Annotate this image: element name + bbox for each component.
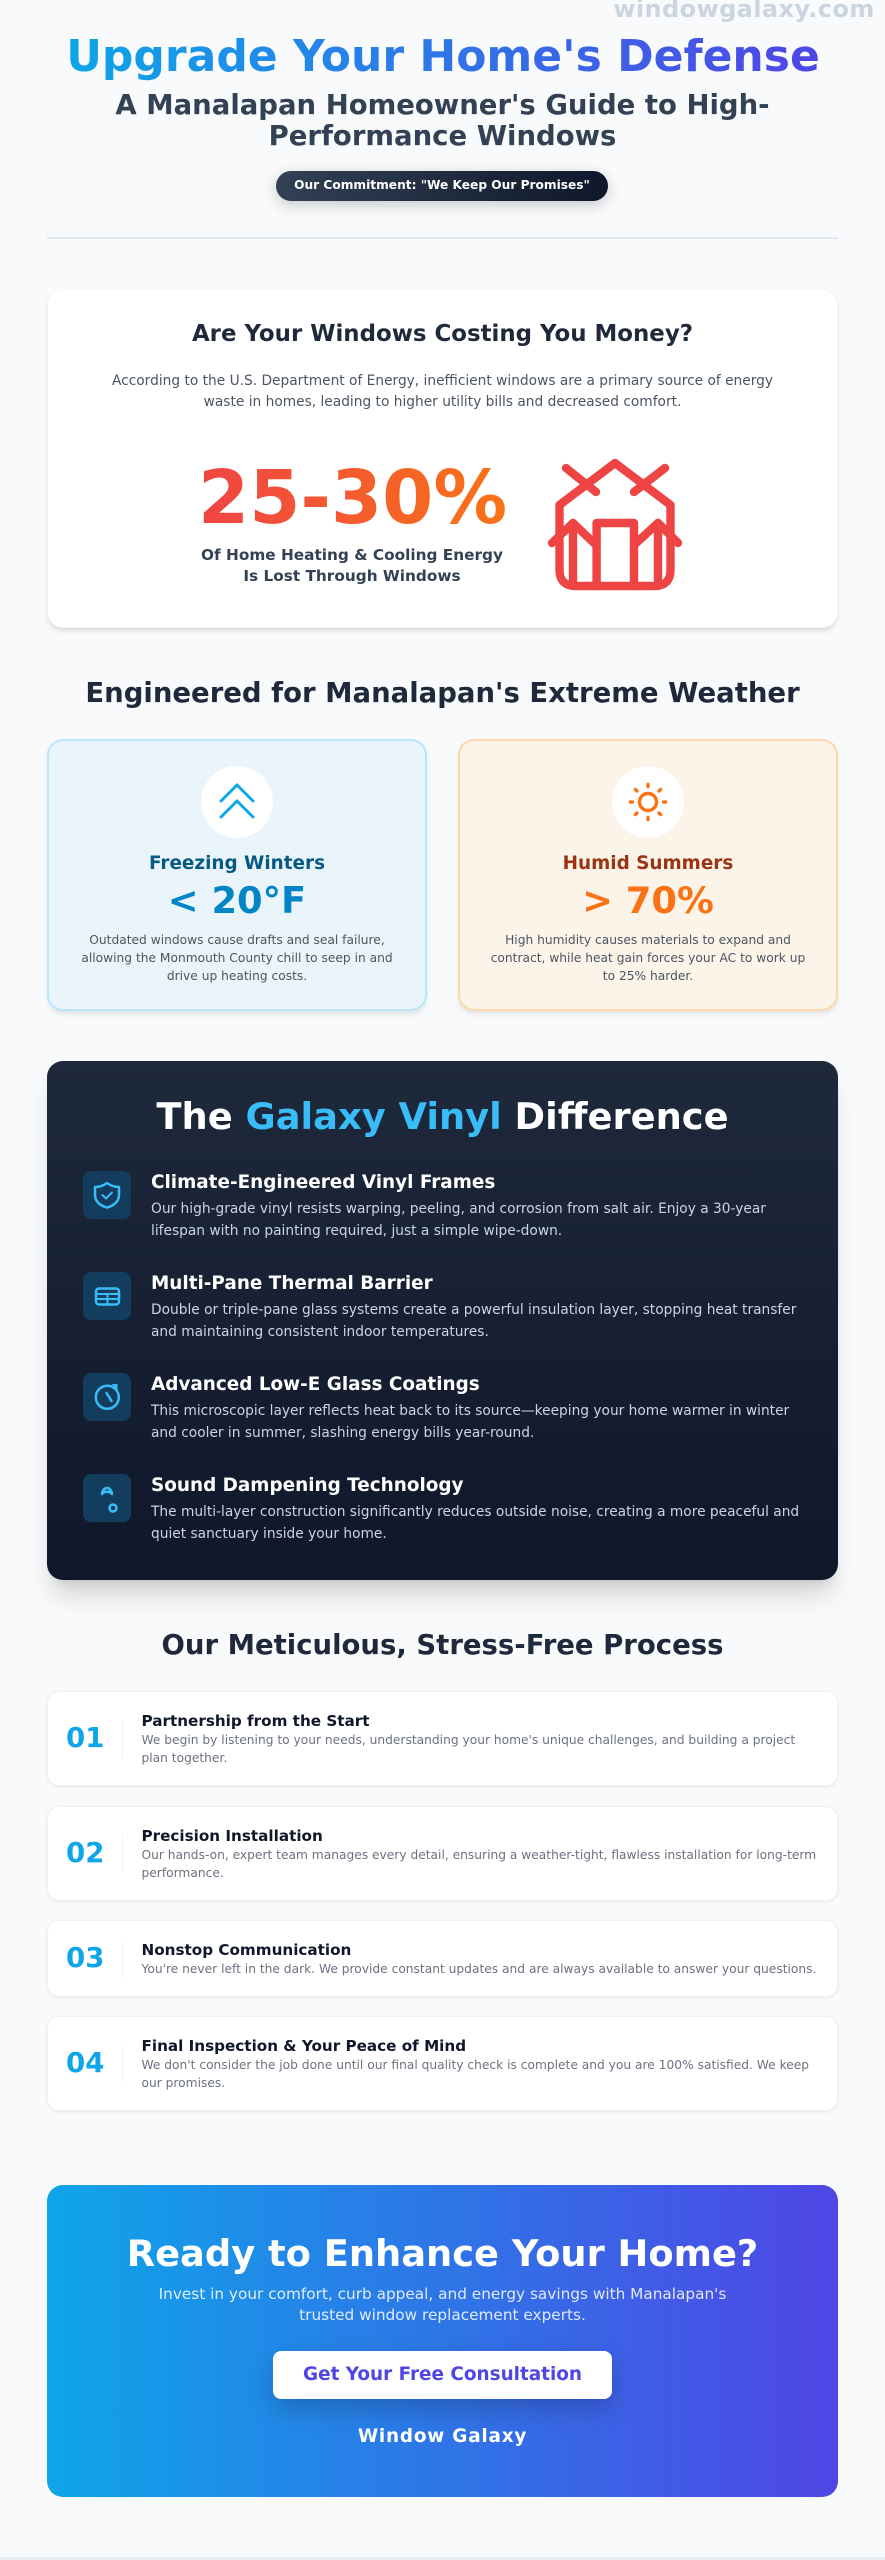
description (81, 933, 393, 983)
stat (198, 456, 507, 585)
stat label: Of Home Heating & Cooling Energy (201, 546, 503, 564)
icon: shield (83, 1171, 131, 1219)
heading: Freezing Winters (149, 852, 325, 874)
heading: The Galaxy Vinyl Difference (156, 1095, 729, 1138)
title: Climate-Engineered Vinyl Frames (151, 1172, 495, 1193)
description (142, 1848, 816, 1880)
heading: Humid Summers (563, 852, 733, 874)
description: This microscopic layer reflects heat back to its source—keeping your home warmer in winter (151, 1403, 789, 1419)
icon: panes (83, 1272, 131, 1320)
title: Upgrade Your Home's Defense (66, 31, 820, 82)
value: > 70% (582, 878, 714, 922)
description: and cooler in summer, slashing energy bills year-round. (151, 1425, 534, 1441)
description (150, 1504, 799, 1542)
panel: energy loss (47, 288, 838, 628)
value: < 20°F (168, 878, 306, 922)
number: 03 (66, 1941, 104, 1974)
title: Final Inspection & Your Peace of Mind (142, 2037, 466, 2055)
section heading: weather: Engineered for Manalapan's Extreme Weather (85, 676, 800, 708)
icon: sound (83, 1474, 131, 1522)
feature: low-e glass (83, 1373, 790, 1441)
commitment pill (276, 171, 608, 201)
button (273, 2351, 612, 2399)
description (142, 2058, 809, 2090)
stat label (201, 546, 503, 585)
panel: call to action (47, 2185, 838, 2497)
number: 04 (66, 2046, 104, 2079)
description (151, 1302, 796, 1340)
icon: clock (83, 1373, 131, 1421)
description: Our high-grade vinyl resists warping, peeling, and corrosion from salt air. Enjoy a 30-year (151, 1201, 766, 1217)
description: quiet sanctuary inside your home. (151, 1526, 387, 1542)
number: 01 (66, 1721, 104, 1754)
description (142, 1733, 795, 1765)
title: Partnership from the Start (142, 1712, 370, 1730)
description: and maintaining consistent indoor temperatures. (151, 1324, 489, 1340)
step 02 (47, 1806, 838, 1901)
title: Multi-Pane Thermal Barrier (151, 1273, 433, 1294)
description: Outdated windows cause drafts and seal failure, (89, 933, 385, 947)
card: freezing winters (47, 739, 427, 1011)
intro text: waste in homes, leading to higher utility bills and decreased comfort. (204, 394, 681, 410)
header (47, 31, 838, 239)
button: Get Your Free Consultation (303, 2364, 582, 2385)
commitment pill: Our Commitment: "We Keep Our Promises" (294, 178, 590, 192)
text: trusted window replacement experts. (299, 2306, 586, 2324)
title: Precision Installation (142, 1827, 323, 1845)
description: We don't consider the job done until our final quality check is complete and you are 100% satisfied. We keep (142, 2058, 809, 2072)
step 03 (47, 1920, 838, 1997)
subtitle (115, 89, 770, 152)
description: We begin by listening to your needs, understanding your home's unique challenges, and building a project (142, 1733, 795, 1747)
card: humid summers (458, 739, 838, 1011)
description: allowing the Monmouth County chill to seep in and (81, 951, 393, 965)
subtitle: Performance Windows (269, 120, 616, 152)
number: 02 (66, 1836, 104, 1869)
icon: double chevron (201, 766, 273, 838)
description: contract, while heat gain forces your AC to work up (491, 951, 805, 965)
icon: sun (612, 766, 684, 838)
icon: house with windows (548, 458, 682, 590)
description (491, 933, 805, 983)
description: plan together. (142, 1751, 227, 1765)
stat number: 25-30% (198, 456, 507, 541)
subtitle: A Manalapan Homeowner's Guide to High- (115, 89, 770, 121)
heading: Ready to Enhance Your Home? (127, 2232, 758, 2275)
description: Our hands-on, expert team manages every detail, ensuring a weather-tight, flawless installation for long-term (142, 1848, 816, 1862)
description: lifespan with no painting required, just a simple wipe-down. (151, 1223, 562, 1239)
intro text: According to the U.S. Department of Energy, inefficient windows are a primary source of energy (112, 373, 773, 389)
description: our promises. (142, 2076, 225, 2090)
panel: weather cards (47, 739, 838, 1015)
description: to 25% harder. (603, 969, 693, 983)
feature: thermal barrier (83, 1272, 796, 1340)
description: You're never left in the dark. We provide constant updates and are always available to answer your questions. (142, 1962, 816, 1976)
title: Nonstop Communication (142, 1941, 351, 1959)
description: drive up heating costs. (167, 969, 307, 983)
description: Double or triple-pane glass systems create a powerful insulation layer, stopping heat transfer (151, 1302, 796, 1318)
description (151, 1201, 766, 1239)
brand: Window Galaxy (358, 2426, 527, 2446)
section heading: process: Our Meticulous, Stress-Free Process (162, 1628, 723, 1660)
feature: vinyl frames (83, 1171, 766, 1239)
step 01 (47, 1690, 838, 1786)
text: Invest in your comfort, curb appeal, and energy savings with Manalapan's (159, 2285, 726, 2303)
step 04 (47, 2016, 838, 2111)
intro text (112, 373, 773, 410)
text (159, 2285, 726, 2324)
description: High humidity causes materials to expand and (505, 933, 791, 947)
stat label: Is Lost Through Windows (243, 567, 461, 585)
heading: Are Your Windows Costing You Money? (192, 320, 693, 346)
description: performance. (142, 1866, 224, 1880)
description: The multi-layer construction significantly reduces outside noise, creating a more peaceful and (151, 1504, 799, 1520)
title: Advanced Low-E Glass Coatings (151, 1374, 480, 1395)
panel: galaxy vinyl difference (47, 1061, 838, 1580)
title: Sound Dampening Technology (151, 1475, 464, 1496)
description (150, 1403, 790, 1441)
feature: sound dampening (83, 1474, 799, 1542)
